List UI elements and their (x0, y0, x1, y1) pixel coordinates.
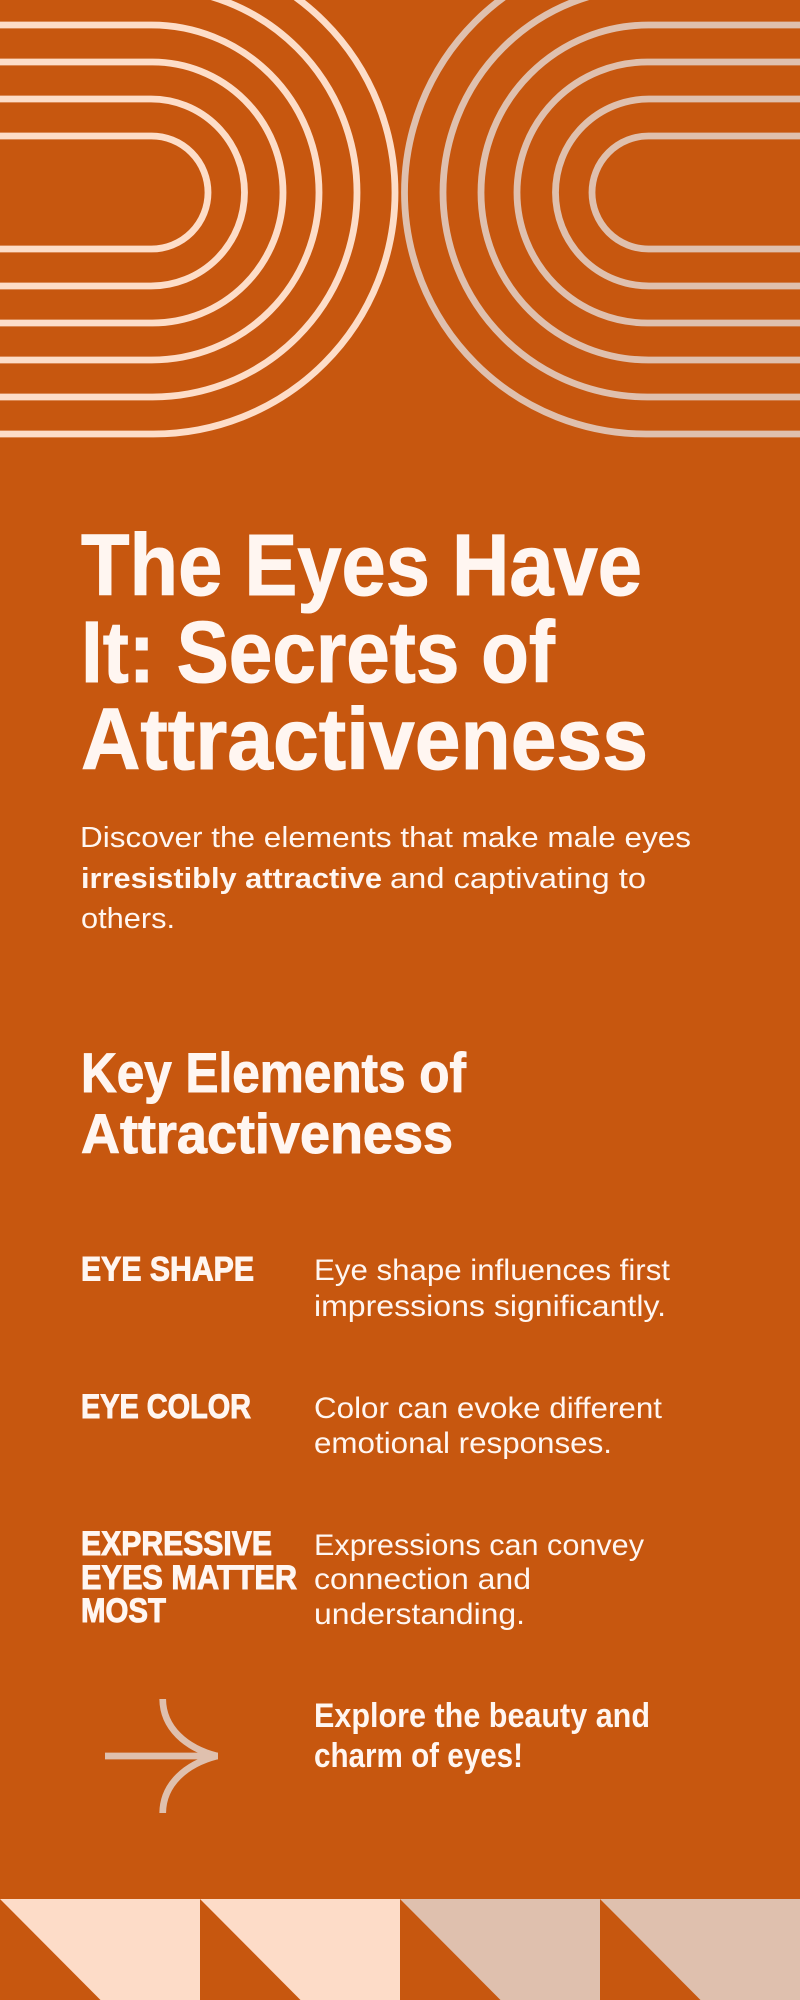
intro paragraph: irresistibly attractive (81, 863, 382, 895)
decorative arches: right set (404, 0, 800, 434)
element: eye color (81, 1388, 663, 1460)
description: eye shape: Eye shape influences first (314, 1254, 671, 1287)
section heading (81, 1041, 466, 1165)
description: eye shape (314, 1254, 671, 1323)
description: eye color: Color can evoke different (314, 1392, 663, 1425)
description: expressive eyes: Expressions can convey (314, 1529, 644, 1562)
label: expressive eyes: EYES MATTER (81, 1559, 297, 1597)
intro paragraph: Discover the elements that make male eyes (80, 822, 691, 854)
intro paragraph (80, 822, 691, 935)
label: expressive eyes (81, 1525, 297, 1630)
label: expressive eyes: MOST (81, 1592, 166, 1630)
call to action: Explore the beauty and (314, 1697, 650, 1735)
footer triangle pattern (0, 1899, 800, 2000)
label: expressive eyes: EXPRESSIVE (81, 1525, 272, 1563)
intro paragraph: and captivating to (390, 863, 646, 895)
call to action: charm of eyes! (314, 1737, 523, 1775)
description: expressive eyes (314, 1529, 644, 1631)
title: The Eyes Have (81, 517, 642, 614)
description: expressive eyes: understanding. (314, 1598, 525, 1631)
section heading: Key Elements of (81, 1041, 466, 1104)
section heading: Attractiveness (81, 1102, 453, 1165)
element: eye shape (81, 1250, 671, 1323)
title (81, 517, 648, 788)
decorative arches: left set (0, 0, 395, 434)
label: eye color: EYE COLOR (81, 1388, 251, 1426)
description: eye color (314, 1392, 663, 1460)
title: It: Secrets of (81, 604, 556, 701)
intro paragraph: others. (81, 903, 175, 935)
description: eye color: emotional responses. (314, 1427, 612, 1460)
element: expressive eyes (81, 1525, 644, 1631)
call to action (314, 1697, 650, 1775)
icon: arrow (105, 1699, 218, 1813)
title: Attractiveness (81, 691, 648, 788)
label: eye shape: EYE SHAPE (81, 1250, 254, 1288)
description: eye shape: impressions significantly. (314, 1290, 666, 1323)
description: expressive eyes: connection and (314, 1563, 531, 1596)
